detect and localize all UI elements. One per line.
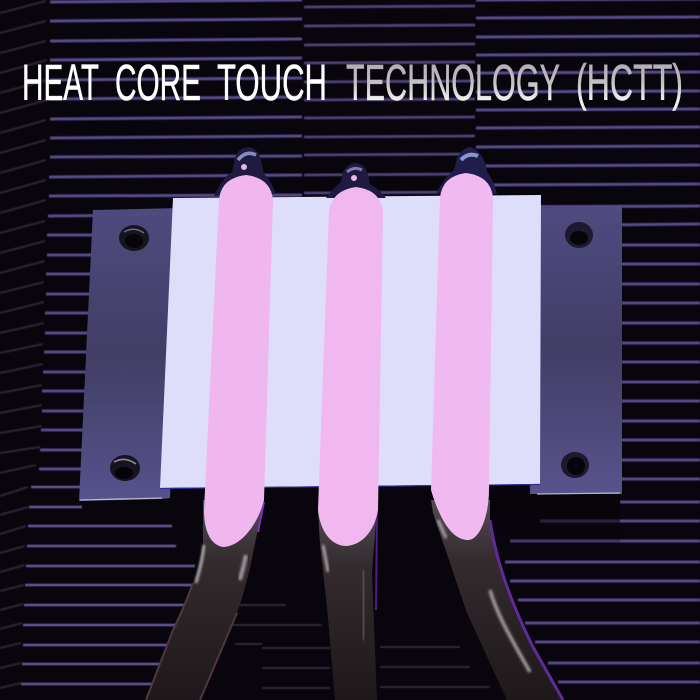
middle heat pipe: [318, 505, 377, 700]
icon: screw hole bottom left: [110, 455, 140, 481]
left angled fins: [0, 1, 47, 688]
nub right: [436, 147, 497, 194]
left mounting plate: [79, 208, 180, 501]
nub left: [214, 147, 276, 196]
title: HEAT: [22, 54, 99, 111]
contact strips: [204, 173, 493, 547]
pink strip left: [204, 175, 273, 547]
right column fins: [476, 0, 700, 682]
thermal pad: [160, 195, 541, 488]
nub middle: [326, 163, 386, 198]
heat pipe end nubs: [214, 147, 497, 198]
pink strip middle: [318, 187, 383, 546]
title: TOUCH: [217, 54, 327, 111]
icon: screw hole bottom right: [561, 452, 589, 478]
icon: screw hole top left: [119, 225, 149, 251]
pink strip right: [431, 173, 493, 540]
middle column fins: [304, 6, 475, 193]
title: TECHNOLOGY: [346, 54, 560, 111]
icon: screw hole top right: [565, 222, 593, 248]
left column fins: [21, 0, 302, 684]
right mounting plate: [530, 207, 622, 494]
title: [22, 54, 683, 111]
shadow below assembly: [213, 494, 620, 688]
heat pipes lower section: [146, 500, 563, 700]
left heat pipe: [146, 500, 264, 700]
faint fins in pipe gaps: [213, 605, 490, 688]
right heat pipe: [431, 500, 563, 700]
title: CORE: [115, 54, 201, 111]
